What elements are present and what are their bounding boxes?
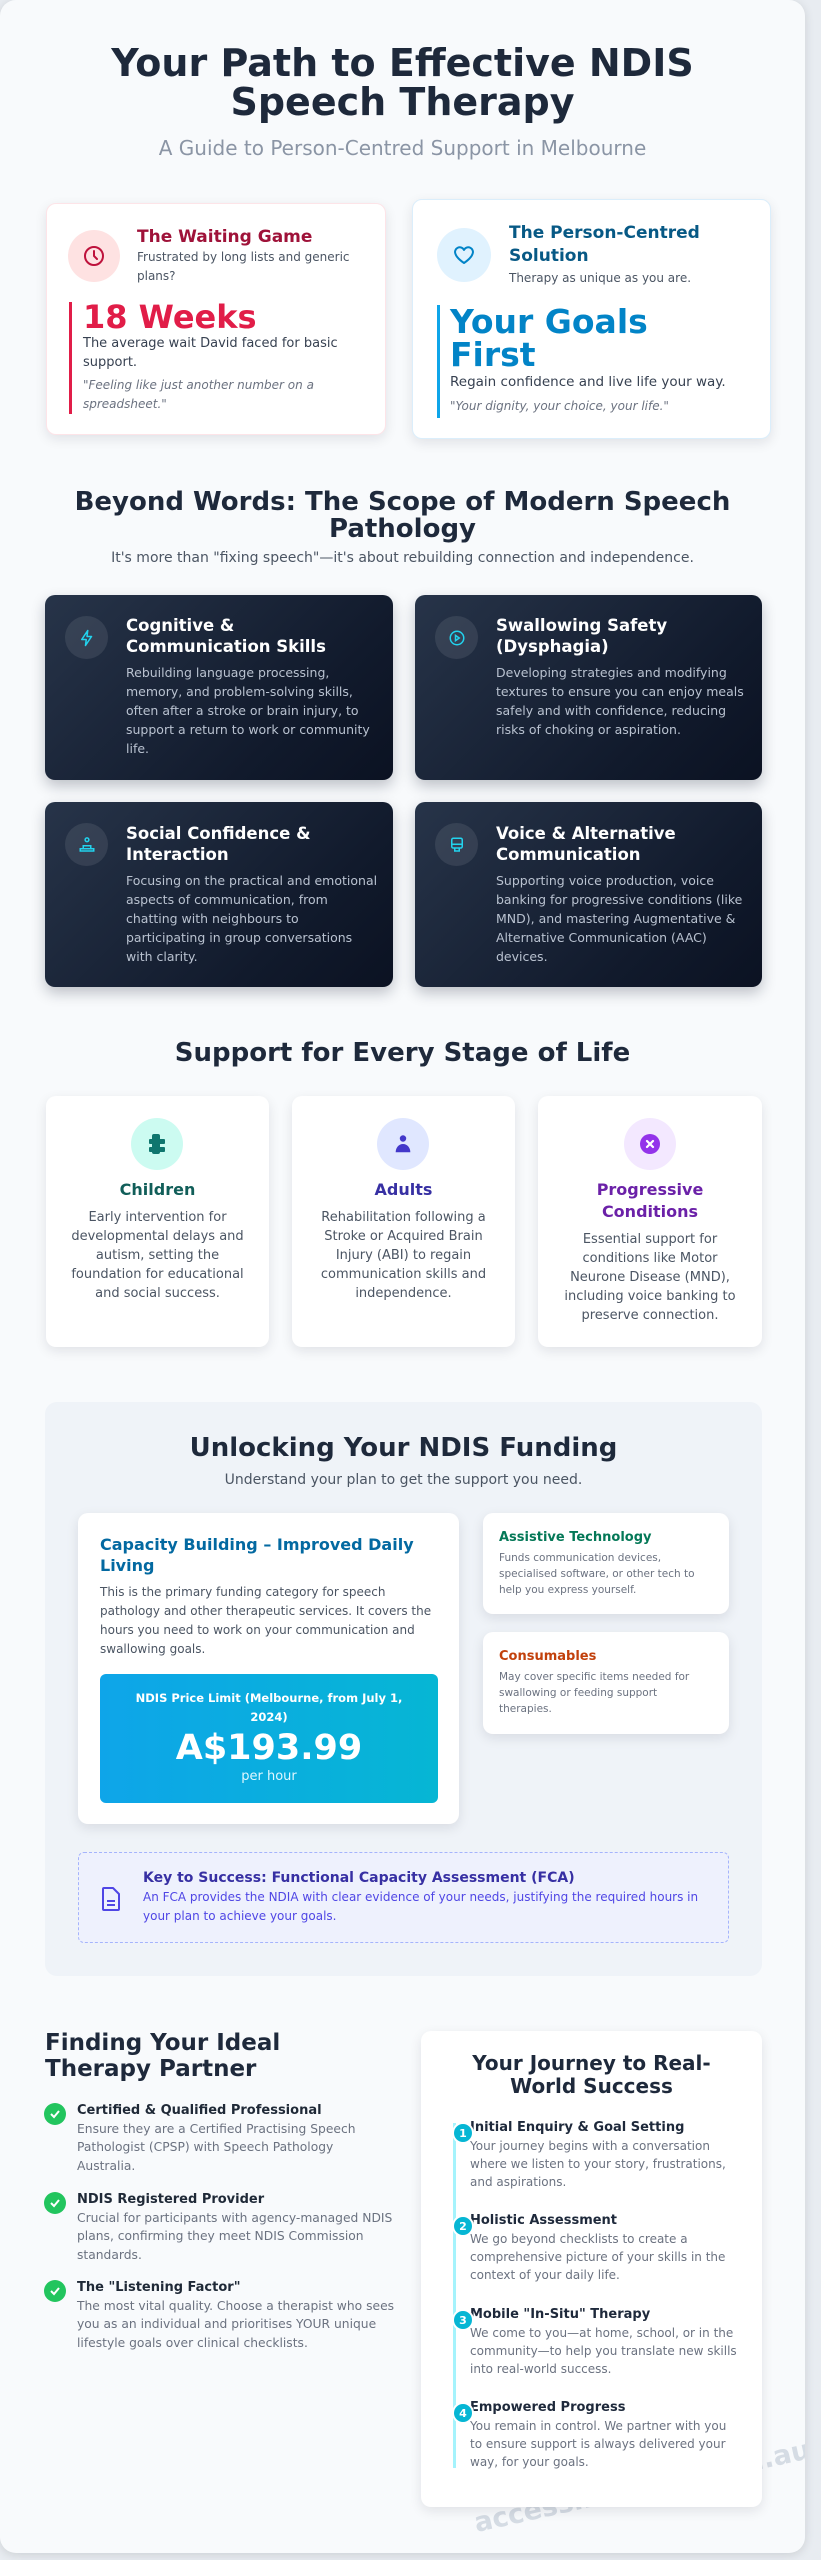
card title <box>496 824 676 864</box>
step 2 <box>452 2215 474 2237</box>
heading: support for every stage: Support for Every Stage of Life <box>175 1038 630 1068</box>
card: assistive technology <box>483 1513 729 1614</box>
panel: journey: Holistic Assessment <box>470 2213 617 2228</box>
text: Children <box>120 1180 195 1199</box>
card: assistive technology: Assistive Technology <box>499 1530 652 1545</box>
text <box>564 1180 736 1323</box>
icon: document <box>102 1887 120 1911</box>
watermark: accessiblecare.com.au <box>471 2434 805 2539</box>
panel: person-centred solution <box>412 199 771 439</box>
price box: A$193.99 <box>176 1728 362 1768</box>
heading: beyond words: Beyond Words: The Scope of Modern Speech <box>75 487 730 517</box>
title: Your Path to Effective NDIS <box>111 41 694 85</box>
card title: Swallowing Safety <box>496 616 667 635</box>
heading: finding partner: Finding Your Ideal <box>45 2030 280 2056</box>
goals block <box>437 305 757 418</box>
card title <box>126 616 326 656</box>
subheading: Therapy as unique as you are. <box>509 271 691 285</box>
goals block: "Your dignity, your choice, your life." <box>450 399 669 413</box>
text: Essential support for conditions like Motor Neurone Disease (MND), including voice banking to preserve connection. <box>564 1232 736 1323</box>
card title <box>496 616 667 656</box>
card: consumables <box>483 1632 729 1734</box>
callout: FCA: An FCA provides the NDIA with clear evidence of your needs, justifying the required hours in your plan to achieve your goals. <box>143 1890 698 1923</box>
text: Progressive <box>597 1180 703 1199</box>
subheading: It's more than "fixing speech"—it's about rebuilding connection and independence. <box>111 550 694 566</box>
card title: Capacity Building – Improved Daily Living <box>100 1535 414 1575</box>
panel: journey: Initial Enquiry & Goal Setting <box>470 2120 684 2135</box>
card title: Cognitive & <box>126 616 234 635</box>
item 3 <box>44 2280 66 2302</box>
subheading: Frustrated by long lists and generic plans? <box>137 250 350 283</box>
icon: x circle <box>624 1118 676 1170</box>
card: consumables: Consumables <box>499 1649 596 1664</box>
checklist: Ensure they are a Certified Practising Speech Pathologist (CPSP) with Speech Pathology Australia. <box>77 2122 356 2173</box>
panel: cognitive <box>45 595 393 780</box>
callout: FCA <box>78 1852 729 1943</box>
step 3: 3 <box>459 2314 467 2326</box>
heading: funding: Unlocking Your NDIS Funding <box>190 1433 617 1463</box>
panel: adults <box>292 1096 515 1347</box>
goals block: Regain confidence and live life your way. <box>450 374 726 390</box>
icon: play circle <box>435 616 478 659</box>
price box <box>100 1674 438 1803</box>
icon: bolt <box>65 616 108 659</box>
panel: progressive <box>538 1096 762 1347</box>
journey title <box>472 2051 711 2098</box>
journey title: Your Journey to Real- <box>472 2051 711 2075</box>
title: Speech Therapy <box>230 80 575 124</box>
panel: the waiting game <box>46 203 386 435</box>
card title: Communication <box>496 845 641 864</box>
item 1 <box>44 2103 66 2125</box>
checklist: The "Listening Factor" <box>77 2280 240 2295</box>
text: Rehabilitation following a Stroke or Acquired Brain Injury (ABI) to regain communication skills and independence. <box>321 1210 486 1301</box>
card text: Focusing on the practical and emotional aspects of communication, from chatting with neighbours to participating in group conversations with clarity. <box>126 873 377 964</box>
heading: beyond words: Pathology <box>329 514 476 544</box>
callout: FCA: Key to Success: Functional Capacity Assessment (FCA) <box>143 1870 575 1886</box>
stat block: The average wait David faced for basic support. <box>83 336 338 370</box>
step 1: 1 <box>459 2126 467 2140</box>
stat block: 18 Weeks <box>83 298 257 336</box>
heading: person-centred: The Person-Centred Solution <box>509 223 700 266</box>
checklist: Crucial for participants with agency-managed NDIS plans, confirming they meet NDIS Commission standards. <box>77 2211 392 2262</box>
card text: Supporting voice production, voice banking for progressive conditions (like MND), and mastering Augmentative & Alternative Communication (AAC) devices. <box>496 873 742 964</box>
heading: finding partner <box>45 2030 280 2082</box>
icon: clock <box>68 230 120 282</box>
text: Early intervention for developmental delays and autism, setting the foundation for educational and social success. <box>71 1210 244 1301</box>
card title: Interaction <box>126 845 229 864</box>
step 4 <box>452 2402 474 2424</box>
card text: This is the primary funding category for speech pathology and other therapeutic services. It covers the hours you need to work on your communication and swallowing goals. <box>100 1585 431 1656</box>
panel: journey: Mobile "In-Situ" Therapy <box>470 2307 650 2322</box>
stat block <box>69 302 369 414</box>
icon: puzzle <box>131 1118 183 1170</box>
step 2: 2 <box>459 2220 467 2232</box>
icon: people <box>65 823 108 866</box>
goals block: Your Goals First <box>450 302 648 374</box>
heading: the waiting game: The Waiting Game <box>137 227 312 247</box>
icon: person <box>377 1118 429 1170</box>
step 3 <box>452 2309 474 2331</box>
panel: funding <box>45 1402 762 1976</box>
price box: NDIS Price Limit (Melbourne, from July 1, 2024) <box>136 1691 402 1724</box>
card title: (Dysphagia) <box>496 637 609 656</box>
heading: beyond words <box>75 487 730 544</box>
icon: heart <box>437 228 491 282</box>
icon: device <box>435 823 478 866</box>
card: assistive technology: Funds communication devices, specialised software, or other tech to help you express yourself. <box>499 1552 695 1596</box>
item 2 <box>44 2192 66 2214</box>
panel: swallowing <box>415 595 762 780</box>
checklist: Certified & Qualified Professional <box>77 2103 322 2118</box>
card text: Developing strategies and modifying textures to ensure you can enjoy meals safely and with confidence, reducing risks of choking or aspiration. <box>496 665 744 737</box>
stat block: "Feeling like just another number on a spreadsheet." <box>83 378 314 411</box>
text: Adults <box>375 1180 432 1199</box>
panel: journey: You remain in control. We partner with you to ensure support is always delivered your way, for your goals. <box>470 2419 726 2469</box>
subtitle: A Guide to Person-Centred Support in Melbourne <box>159 136 646 160</box>
panel: children <box>46 1096 269 1347</box>
panel: journey: We go beyond checklists to create a comprehensive picture of your skills in the context of your daily life. <box>470 2232 725 2282</box>
heading: finding partner: Therapy Partner <box>45 2056 256 2082</box>
card: capacity building <box>78 1513 459 1824</box>
card title <box>126 824 310 864</box>
checklist <box>44 2103 394 2350</box>
panel: journey: Empowered Progress <box>470 2400 625 2415</box>
card title: Voice & Alternative <box>496 824 676 843</box>
panel: journey: We come to you—at home, school, or in the community—to help you translate new skills into real-world success. <box>470 2326 737 2376</box>
title <box>110 41 694 124</box>
card title: Social Confidence & <box>126 824 310 843</box>
card title: Communication Skills <box>126 637 326 656</box>
card text: Rebuilding language processing, memory, and problem-solving skills, often after a stroke or brain injury, to support a return to work or community life. <box>126 665 370 756</box>
price box: per hour <box>241 1769 297 1784</box>
checklist: The most vital quality. Choose a therapist who sees you as an individual and prioritises YOUR unique lifestyle goals over clinical checklists. <box>77 2299 394 2350</box>
panel: journey: Your journey begins with a conversation where we listen to your story, frustrations, and aspirations. <box>470 2139 726 2189</box>
card: consumables: May cover specific items needed for swallowing or feeding support therapies. <box>499 1671 689 1715</box>
journey title: World Success <box>510 2074 673 2098</box>
timeline line <box>453 2123 456 2468</box>
checklist: NDIS Registered Provider <box>77 2192 264 2207</box>
text: Conditions <box>602 1202 698 1221</box>
subheading: Understand your plan to get the support you need. <box>225 1472 582 1488</box>
panel: journey <box>421 2031 762 2507</box>
panel: social <box>45 802 393 987</box>
panel: voice <box>415 802 762 987</box>
step 4: 4 <box>459 2406 467 2420</box>
step 1 <box>452 2122 474 2144</box>
